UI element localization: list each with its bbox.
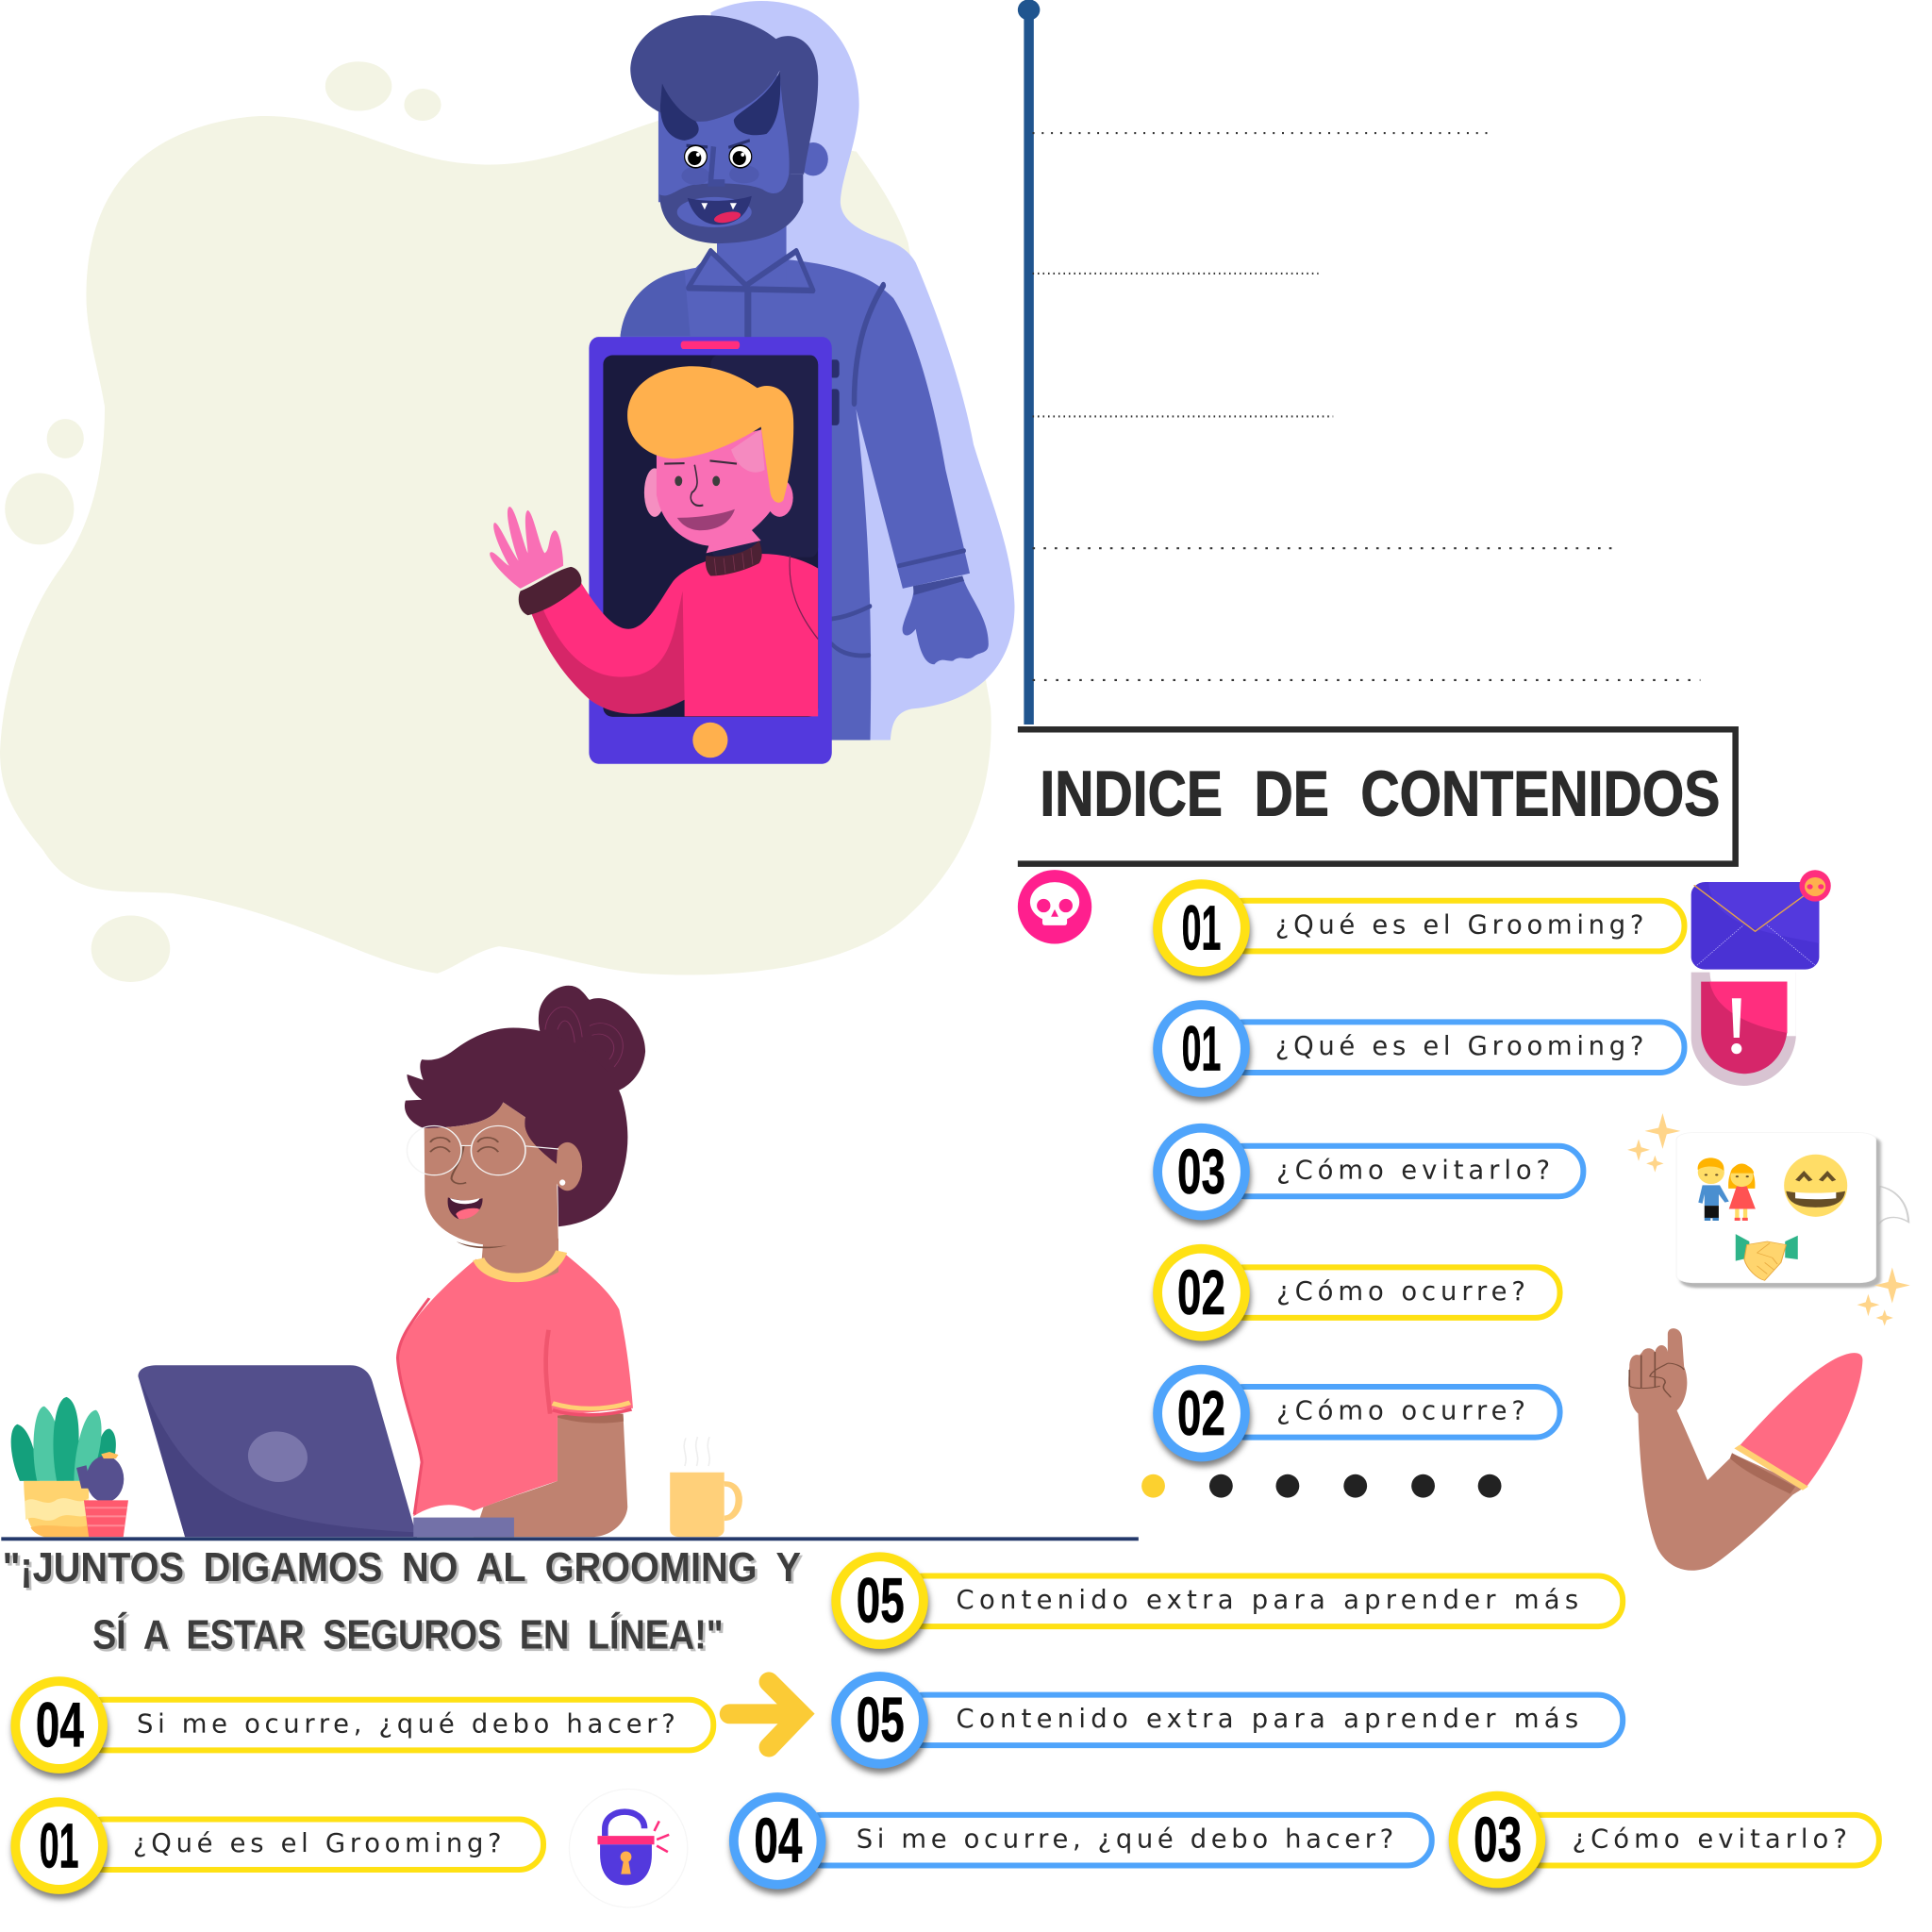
row 05 yellow: 05 [857, 1567, 905, 1637]
row 01 blue: ¿Qué es el Grooming? [1275, 1032, 1643, 1061]
mug [670, 1437, 739, 1537]
row 05 blue: Contenido extra para aprender más [957, 1705, 1578, 1734]
row 03 blue [1158, 1128, 1583, 1215]
row 04 yellow: Si me ocurre, ¿qué debo hacer? [137, 1709, 675, 1739]
slogan: "¡JUNTOS DIGAMOS NO AL GROOMING Y [3, 1545, 801, 1591]
row 04 blue [734, 1797, 1432, 1885]
row 01 yellow bottom [15, 1802, 543, 1890]
icon: open padlock [569, 1789, 688, 1907]
emoji card [1676, 1133, 1908, 1288]
man body [621, 223, 989, 741]
slogan [3, 1545, 801, 1658]
row 03 yellow [1454, 1796, 1879, 1883]
row 02 blue [1158, 1370, 1560, 1457]
title: INDICE DE CONTENIDOS [1040, 759, 1720, 830]
row 01 yellow: ¿Qué es el Grooming? [1275, 910, 1643, 940]
row 01 yellow [1158, 884, 1684, 972]
row 01 blue [1158, 1005, 1684, 1092]
row 04 yellow [15, 1681, 713, 1769]
ground line [1, 1538, 1139, 1541]
row 03 blue: 03 [1177, 1138, 1225, 1208]
row 04 blue: Si me ocurre, ¿qué debo hacer? [857, 1825, 1393, 1855]
arrow [729, 1682, 801, 1747]
envelope [1691, 870, 1831, 970]
boy on screen [490, 366, 818, 716]
row 03 yellow: 03 [1474, 1806, 1522, 1875]
row 01 yellow: 01 [1182, 893, 1221, 963]
title box [1018, 729, 1736, 864]
illustration: groomer behind phone with boy [490, 1, 1014, 764]
icon: skull [1018, 870, 1091, 943]
row 05 blue: 05 [857, 1686, 905, 1756]
row 02 blue: ¿Cómo ocurre? [1276, 1397, 1525, 1426]
laptop [138, 1365, 514, 1537]
plants [11, 1397, 128, 1537]
icon: envelope and shield [1691, 870, 1831, 1086]
row 01 yellow bottom: 01 [40, 1811, 79, 1881]
arm pointing up [1628, 1328, 1862, 1571]
row 04 blue: 04 [754, 1807, 802, 1876]
row 02 yellow: ¿Cómo ocurre? [1276, 1277, 1525, 1307]
pagination dots [1141, 1474, 1502, 1498]
slogan: SÍ A ESTAR SEGUROS EN LÍNEA!" [92, 1613, 724, 1658]
illustration: woman at laptop [11, 986, 739, 1537]
man halo [710, 1, 1014, 741]
sparkles [1627, 1113, 1910, 1326]
woman [397, 986, 645, 1537]
background blob [0, 61, 991, 982]
phone [589, 337, 832, 764]
row 02 yellow [1158, 1249, 1560, 1336]
row 01 blue: 01 [1182, 1014, 1221, 1084]
row 01 yellow bottom: ¿Qué es el Grooming? [133, 1829, 502, 1858]
man head [630, 15, 828, 243]
row 05 yellow: Contenido extra para aprender más [957, 1586, 1578, 1615]
shield alert [1691, 972, 1796, 1086]
row 05 yellow [836, 1557, 1623, 1644]
row 03 yellow: ¿Cómo evitarlo? [1573, 1825, 1847, 1855]
row 02 blue: 02 [1177, 1379, 1225, 1449]
row 02 yellow: 02 [1177, 1258, 1225, 1328]
dotted lines [1033, 133, 1700, 680]
illustration: emoji card and arm [1627, 1113, 1910, 1571]
row 03 blue: ¿Cómo evitarlo? [1276, 1156, 1550, 1185]
row 05 blue [836, 1676, 1623, 1764]
vertical timeline bar [1018, 0, 1040, 724]
row 04 yellow: 04 [36, 1690, 84, 1760]
